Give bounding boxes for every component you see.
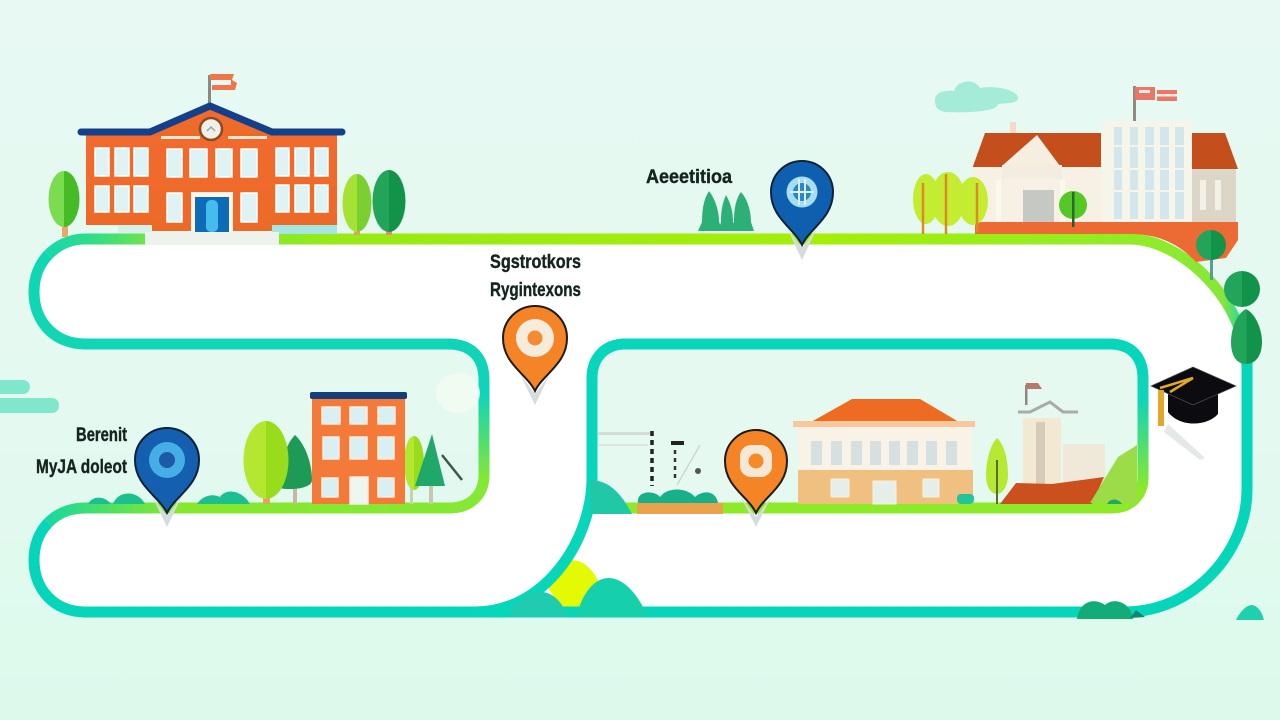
yellow hill behind road xyxy=(546,560,600,617)
cream hall xyxy=(972,135,1102,223)
green slope xyxy=(1090,445,1137,503)
construction site sketch xyxy=(598,431,701,486)
label: top pin: Aeeetitioa xyxy=(646,167,732,188)
hip roof xyxy=(811,399,959,422)
hill and hedges at panel left xyxy=(590,480,723,514)
conifer trees xyxy=(698,191,754,231)
bottom hills xyxy=(510,578,648,617)
upper right campus building xyxy=(913,82,1238,262)
beige towers xyxy=(1000,383,1137,504)
tower roofline xyxy=(1018,402,1078,412)
trees beside school xyxy=(48,170,406,237)
right wing xyxy=(1192,169,1236,223)
brick wings xyxy=(86,108,337,231)
bushes lower left xyxy=(88,492,250,504)
clock xyxy=(200,118,222,140)
roof xyxy=(81,106,342,132)
orange base xyxy=(975,222,1238,262)
label: middle pin: Rygintexons xyxy=(490,280,581,301)
tan lower floor xyxy=(798,470,973,504)
trees behind xyxy=(244,421,462,504)
plinth xyxy=(118,225,337,234)
flags xyxy=(1133,86,1177,121)
round tree xyxy=(1059,191,1087,227)
terracotta plaza xyxy=(1000,477,1104,504)
tower flag xyxy=(1025,383,1042,405)
orange apartment building and trees xyxy=(244,392,462,504)
location pin: orange middle xyxy=(503,306,567,405)
label: lower left pin: Berenit xyxy=(76,425,128,446)
school building top left xyxy=(81,74,342,245)
tassel xyxy=(1158,390,1164,426)
trees at road bend xyxy=(1196,230,1262,364)
small teal hill xyxy=(1236,605,1264,620)
soft glow on road edge xyxy=(436,373,480,413)
left cloud xyxy=(0,380,59,413)
door xyxy=(191,192,233,232)
cornice trim xyxy=(161,136,267,139)
steps xyxy=(145,232,279,245)
location pin: blue lower left xyxy=(135,428,199,527)
inner campus panel xyxy=(592,344,1143,508)
lime trees xyxy=(913,172,988,234)
facade xyxy=(312,396,405,504)
lime tree and shrub xyxy=(957,438,1008,504)
cloud xyxy=(935,82,1018,112)
flat roof xyxy=(310,392,407,399)
lower windows xyxy=(831,479,939,504)
apartment windows xyxy=(322,407,395,504)
flag xyxy=(208,74,237,106)
windows xyxy=(95,148,328,222)
cornice xyxy=(793,421,975,427)
road edges xyxy=(34,239,1247,612)
colonial building xyxy=(793,399,975,504)
location pin: blue top xyxy=(771,161,833,260)
upper windows xyxy=(811,441,957,465)
chimney xyxy=(1010,122,1016,136)
white winding road surface xyxy=(34,239,1247,612)
cap shadow xyxy=(1164,424,1205,460)
label: middle pin: Sgstrotkors xyxy=(490,252,581,273)
bushes on bottom road xyxy=(1077,601,1145,619)
upper floor xyxy=(798,427,972,471)
glass tower xyxy=(1102,121,1192,223)
location pin: orange lower xyxy=(725,430,787,527)
terracotta roofs xyxy=(972,133,1238,169)
label: lower left pin: MyJA doleot xyxy=(36,457,128,478)
label: middle pin xyxy=(490,252,581,301)
label: lower left pin xyxy=(36,425,128,478)
graduation cap xyxy=(1151,367,1236,460)
